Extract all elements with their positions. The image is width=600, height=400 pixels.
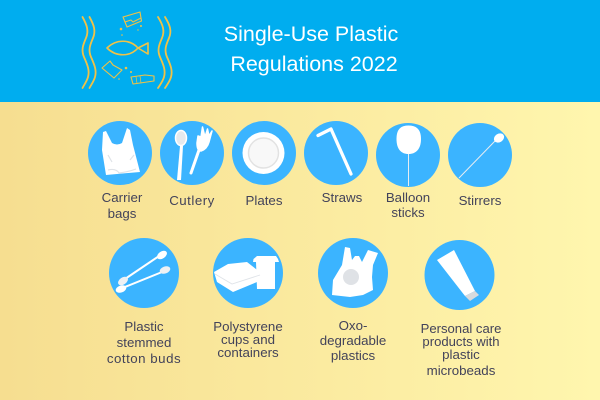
item: polystyrene cups and containers: Polystyrene: [213, 319, 283, 334]
item: straws: [304, 121, 368, 205]
item: oxo-degradable plastics: plastics: [331, 348, 376, 363]
item: oxo-degradable plastics: [318, 238, 388, 363]
item: plates: Plates: [246, 193, 283, 208]
item: plates: [232, 121, 296, 208]
icon: fish and plastic waste: [82, 12, 172, 88]
item: plastic stemmed cotton buds: cotton buds: [107, 351, 181, 366]
item: plastic stemmed cotton buds: [107, 238, 181, 366]
title: [224, 22, 398, 76]
item: carrier bags: [88, 121, 152, 221]
item: personal care products with plastic microbeads: Personal care: [421, 321, 501, 336]
item: carrier bags: Carrier: [102, 190, 143, 205]
item: personal care products with plastic microbeads: microbeads: [427, 363, 496, 378]
item: personal care products with plastic microbeads: products with: [422, 334, 500, 349]
item: balloon sticks: [376, 123, 440, 220]
item: oxo-degradable plastics: Oxo-: [339, 318, 367, 333]
title: Single-Use Plastic: [224, 22, 398, 46]
item: polystyrene cups and containers: cups and: [221, 332, 275, 347]
item: plastic stemmed cotton buds: stemmed: [117, 335, 171, 350]
title: Regulations 2022: [230, 52, 398, 76]
item: personal care products with plastic microbeads: [421, 240, 501, 378]
item: cutlery: Cutlery: [169, 193, 215, 208]
item: personal care products with plastic microbeads: plastic: [442, 347, 480, 362]
item: cutlery: [160, 121, 224, 208]
item: balloon sticks: sticks: [391, 205, 425, 220]
item: polystyrene cups and containers: [213, 238, 283, 360]
item: carrier bags: bags: [108, 206, 137, 221]
item: stirrers: [448, 123, 512, 208]
item: polystyrene cups and containers: containers: [217, 345, 279, 360]
item: plastic stemmed cotton buds: Plastic: [124, 319, 164, 334]
item: balloon sticks: Balloon: [386, 190, 430, 205]
item: stirrers: Stirrers: [459, 193, 502, 208]
header band: [0, 0, 600, 102]
background: [0, 102, 600, 400]
item: oxo-degradable plastics: degradable: [320, 333, 386, 348]
item: straws: Straws: [322, 190, 363, 205]
